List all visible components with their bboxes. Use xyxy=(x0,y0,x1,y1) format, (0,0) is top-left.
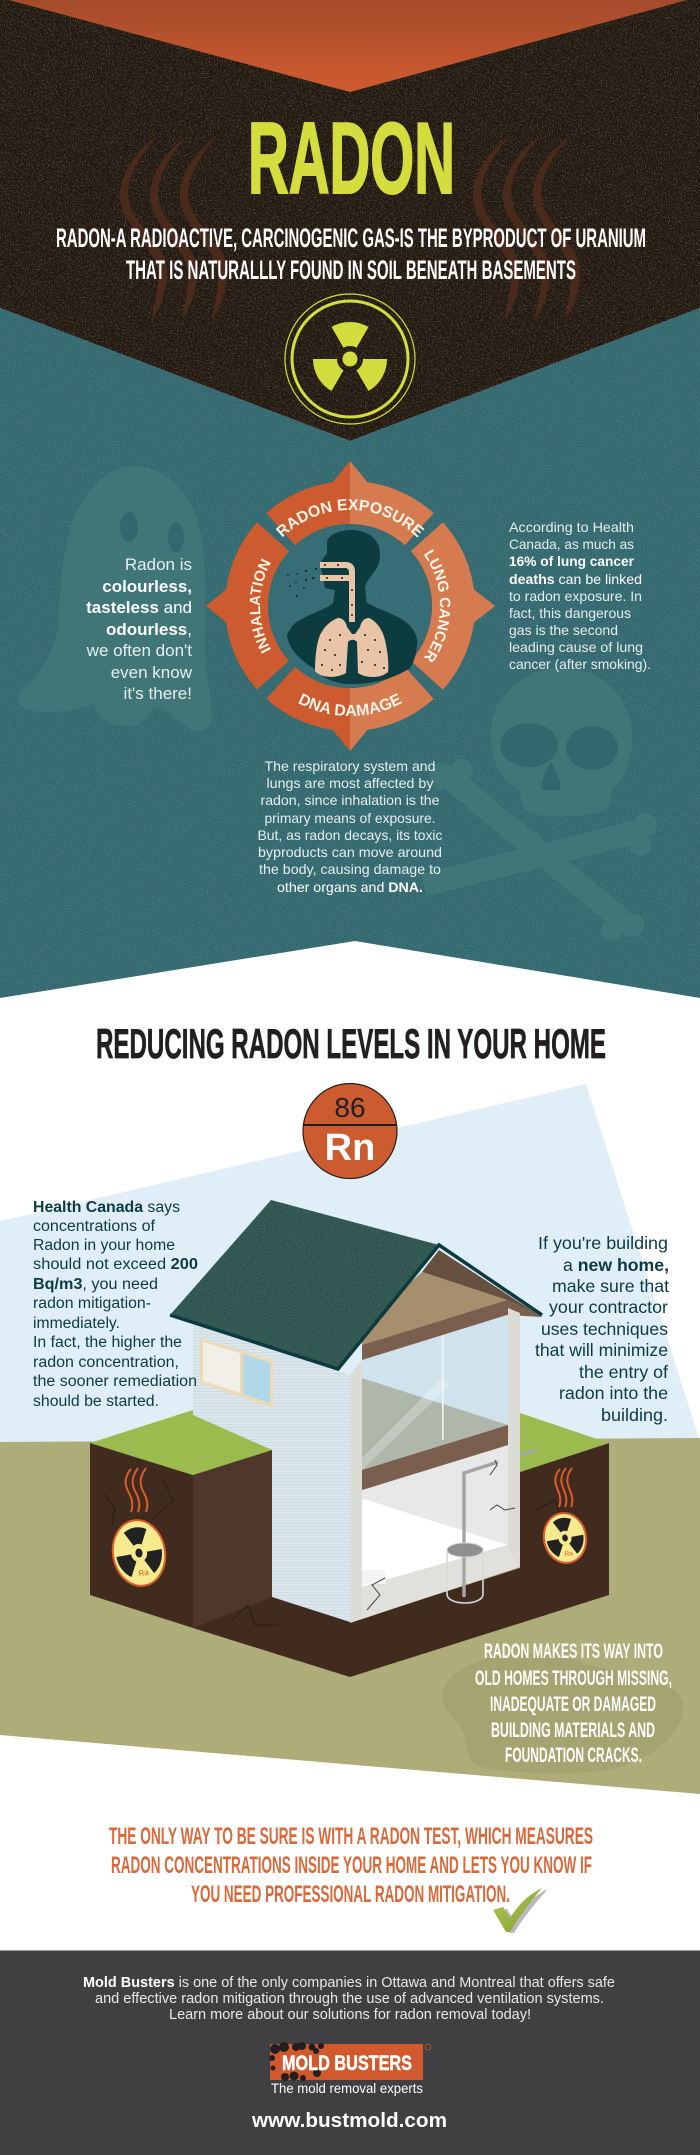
icon: radiation disc left: Ra xyxy=(138,1568,150,1578)
text block: new home: If you're building xyxy=(538,1233,668,1253)
basement xyxy=(350,1425,520,1623)
wheel segments dark xyxy=(206,461,495,751)
text block: colourless: Radon is xyxy=(125,555,192,574)
illustration: house cross-section xyxy=(90,1200,609,1677)
text block: health canada limit xyxy=(33,1199,198,1410)
text block: health canada statistic: 16% of lung cancer xyxy=(509,553,635,569)
subtitle xyxy=(56,223,646,285)
text block: health canada limit: should be started. xyxy=(33,1393,159,1410)
text block: new home: that will minimize xyxy=(535,1340,668,1360)
text block: radon test xyxy=(109,1823,593,1908)
text block: respiratory system: byproducts can move around xyxy=(258,844,442,860)
icon: radon wisps left xyxy=(120,137,227,320)
website url: www.bustmold.com xyxy=(251,2110,447,2132)
icon: Rn element badge: 86 xyxy=(334,1092,366,1123)
text block: health canada statistic: to radon exposure. In xyxy=(509,588,642,604)
label: lung cancer: LUNG CANCER xyxy=(424,549,450,662)
gable interior xyxy=(362,1250,542,1360)
columns xyxy=(350,1308,520,1622)
icon: radiation disc right xyxy=(540,1510,590,1566)
icon: airway and lungs xyxy=(315,562,388,677)
text block: colourless xyxy=(86,555,193,703)
logo: mold busters: The mold removal experts xyxy=(271,2080,423,2096)
text block: health canada statistic: cancer (after smoking). xyxy=(509,656,651,672)
text block: health canada limit: Health Canada says xyxy=(33,1199,180,1216)
icon: radiation symbol xyxy=(285,294,415,424)
text block: health canada limit: the sooner remediation xyxy=(33,1373,197,1390)
siding wall xyxy=(193,1320,350,1622)
text block: health canada statistic: gas is the second xyxy=(509,622,618,638)
text block: new home xyxy=(535,1233,669,1425)
text block: respiratory system xyxy=(258,758,442,895)
icon: orange wisps left xyxy=(126,1468,147,1512)
text block: new home: a new home, xyxy=(563,1255,669,1275)
label: DNA damage: DNA DAMAGE xyxy=(298,693,402,716)
text block: about mold busters: and effective radon mitigation through the use of advanced ventilation systems. xyxy=(95,1991,604,2007)
text block: health canada limit: radon mitigation- xyxy=(33,1295,151,1312)
text block: colourless: colourless, xyxy=(102,577,192,596)
icon: radiation disc left xyxy=(108,1516,170,1590)
window xyxy=(200,1338,273,1408)
text block: about mold busters: Mold Busters is one of the only companies in Ottawa and Montreal that offers safe xyxy=(83,1975,615,1991)
text block: health canada limit: Radon in your home xyxy=(33,1237,175,1254)
text block: respiratory system: radon, since inhalation is the xyxy=(260,792,440,808)
text block: respiratory system: But, as radon decays, its toxic xyxy=(258,827,442,843)
logo: mold busters: MOLD BUSTERS xyxy=(282,2052,412,2075)
icon: ghost xyxy=(18,466,212,731)
particles and lung dots xyxy=(287,564,385,671)
icon: Rn element badge: Rn xyxy=(325,1127,375,1169)
text block: health canada limit: In fact, the higher the xyxy=(33,1334,182,1351)
text block: new home: uses techniques xyxy=(541,1319,668,1339)
logo: mold busters xyxy=(269,2042,431,2096)
text block: about mold busters xyxy=(83,1975,615,2023)
icon: skull and crossbones xyxy=(424,668,657,941)
text block: colourless: it's there! xyxy=(124,684,192,703)
radon pipe and sump xyxy=(447,1450,537,1603)
text block: colourless: odourless, xyxy=(106,620,192,639)
wheel segments light half xyxy=(350,461,495,751)
title: RADON xyxy=(248,103,455,215)
text block: health canada statistic: fact, this dangerous xyxy=(509,605,631,621)
text block: new home: radon into the xyxy=(559,1383,668,1403)
text block: health canada statistic: According to Health xyxy=(509,519,634,535)
panel: olive ground xyxy=(0,1438,700,1794)
text block: health canada statistic: Canada, as much as xyxy=(509,536,634,552)
text block: new home: building. xyxy=(601,1405,668,1425)
text block: respiratory system: other organs and DNA. xyxy=(277,879,423,895)
grass xyxy=(90,1410,609,1475)
label: inhalation: INHALATION xyxy=(250,558,271,654)
roof xyxy=(170,1200,542,1369)
panel: footer xyxy=(0,1950,700,2155)
icon: human bust xyxy=(287,530,417,684)
text block: respiratory system: the body, causing damage to xyxy=(259,861,441,877)
text block: health canada statistic: leading cause of lung xyxy=(509,639,643,655)
text block: colourless: we often don't xyxy=(86,641,192,660)
panel: exposure wheel xyxy=(206,461,495,751)
label: radon exposure: RADON EXPOSURE xyxy=(276,499,424,538)
panel: teal background xyxy=(0,308,700,998)
text block: colourless: even know xyxy=(111,663,193,682)
text block: new home: make sure that xyxy=(552,1276,669,1296)
cracks xyxy=(103,1480,560,1625)
text block: health canada limit: should not exceed 200 xyxy=(33,1256,198,1273)
soil block xyxy=(90,1443,609,1677)
text block: health canada statistic: deaths can be linked xyxy=(509,571,642,587)
icon: green check mark xyxy=(493,1888,548,1933)
icon: Rn element badge xyxy=(303,1084,397,1178)
text block: health canada limit: radon concentration, xyxy=(33,1354,179,1371)
text block: colourless: tasteless and xyxy=(86,598,192,617)
panel: blue sky polygon xyxy=(0,1084,700,1443)
text block: about mold busters: Learn more about our solutions for radon removal today! xyxy=(169,2007,531,2023)
text block: respiratory system: primary means of exposure. xyxy=(264,810,436,826)
text block: health canada limit: Bq/m3, you need xyxy=(33,1276,158,1293)
text block: respiratory system: lungs are most affected by xyxy=(266,775,434,791)
icon: radiation disc right: Ra xyxy=(564,1550,574,1558)
panel: soil header xyxy=(0,0,700,441)
icon: orange wisps right xyxy=(555,1468,572,1507)
text block: health canada limit: immediately. xyxy=(33,1315,120,1332)
orange sky chevron xyxy=(9,0,687,92)
text block: health canada limit: concentrations of xyxy=(33,1218,156,1235)
upper floor glass xyxy=(362,1315,508,1470)
text block: respiratory system: The respiratory system and xyxy=(264,758,436,774)
callout: old homes xyxy=(442,1640,684,1773)
text block: new home: your contractor xyxy=(549,1297,668,1317)
text block: new home: the entry of xyxy=(579,1362,668,1382)
icon: radon wisps right xyxy=(473,137,580,320)
text block: health canada statistic xyxy=(509,519,651,672)
